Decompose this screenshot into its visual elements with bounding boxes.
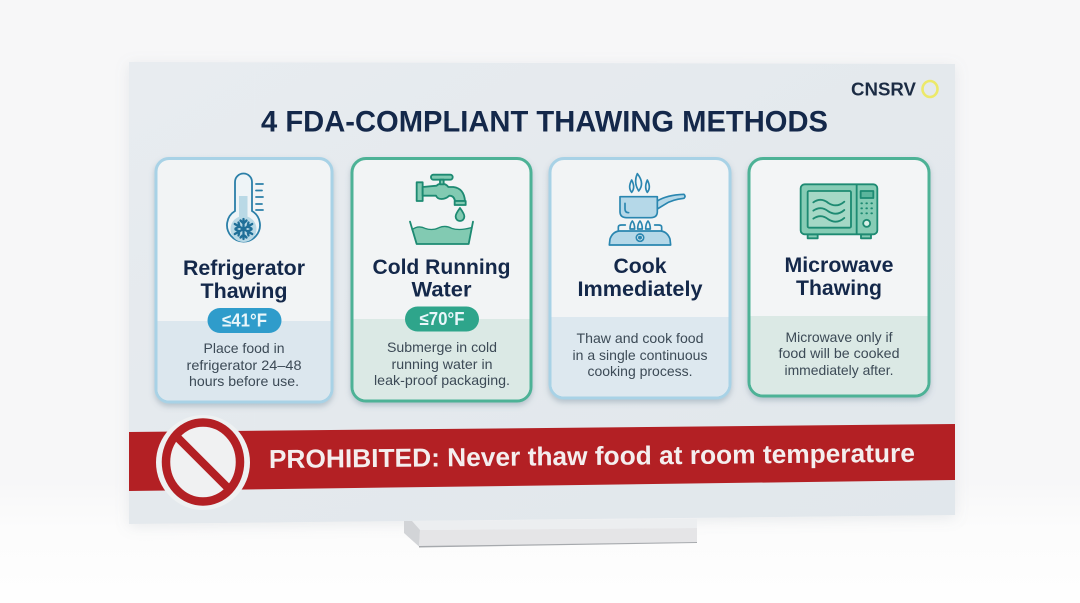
heading: Cold Running Water: Water: [412, 278, 472, 302]
heading: Refrigerator Thawing: Refrigerator: [183, 256, 306, 280]
description: in a single continuous: [572, 347, 708, 363]
heading: Cook Immediately: Immediately: [578, 277, 703, 301]
panel: microwave thawing: [749, 158, 929, 396]
description: Thaw and cook food: [576, 330, 704, 346]
description: food will be cooked: [778, 345, 900, 361]
panel: cold running water: [352, 158, 531, 401]
heading: Refrigerator Thawing: Thawing: [200, 279, 288, 303]
icon: thermometer with snowflake: [227, 174, 263, 242]
icon: microwave: [801, 184, 877, 238]
panel: cook immediately: [550, 158, 730, 398]
banner text: PROHIBITED: Never thaw food at room temperature: [269, 438, 915, 474]
badge: 41F: ≤41°F: [222, 310, 267, 330]
description: hours before use.: [189, 373, 299, 389]
title: 4 FDA-COMPLIANT THAWING METHODS: [261, 106, 828, 138]
heading: Microwave Thawing: Thawing: [796, 276, 882, 300]
description: Submerge in cold: [387, 339, 497, 355]
description: leak-proof packaging.: [374, 372, 510, 388]
heading: Microwave Thawing: Microwave: [784, 253, 894, 277]
prohibited banner: [129, 424, 955, 491]
badge: 41F: [208, 308, 282, 333]
icon: pan on burner: [609, 174, 685, 245]
description: refrigerator 24–48: [186, 357, 302, 373]
heading: Cold Running Water: Cold Running: [372, 255, 510, 279]
heading: Cook Immediately: Cook: [614, 254, 667, 278]
badge: 70F: [405, 306, 479, 332]
description: cooking process.: [588, 363, 692, 379]
sign panel: [129, 62, 955, 524]
icon: prohibition sign: [156, 415, 250, 510]
logo: CNSRV: CNSRV: [851, 80, 916, 100]
panel: refrigerator thawing: [156, 158, 332, 402]
description: Place food in: [204, 340, 284, 356]
icon: faucet and basin: [410, 175, 473, 244]
description: Microwave only if: [786, 329, 893, 345]
description: immediately after.: [784, 362, 894, 378]
badge: 70F: ≤70°F: [420, 309, 465, 329]
display stand: [404, 519, 697, 548]
description: running water in: [392, 356, 492, 372]
